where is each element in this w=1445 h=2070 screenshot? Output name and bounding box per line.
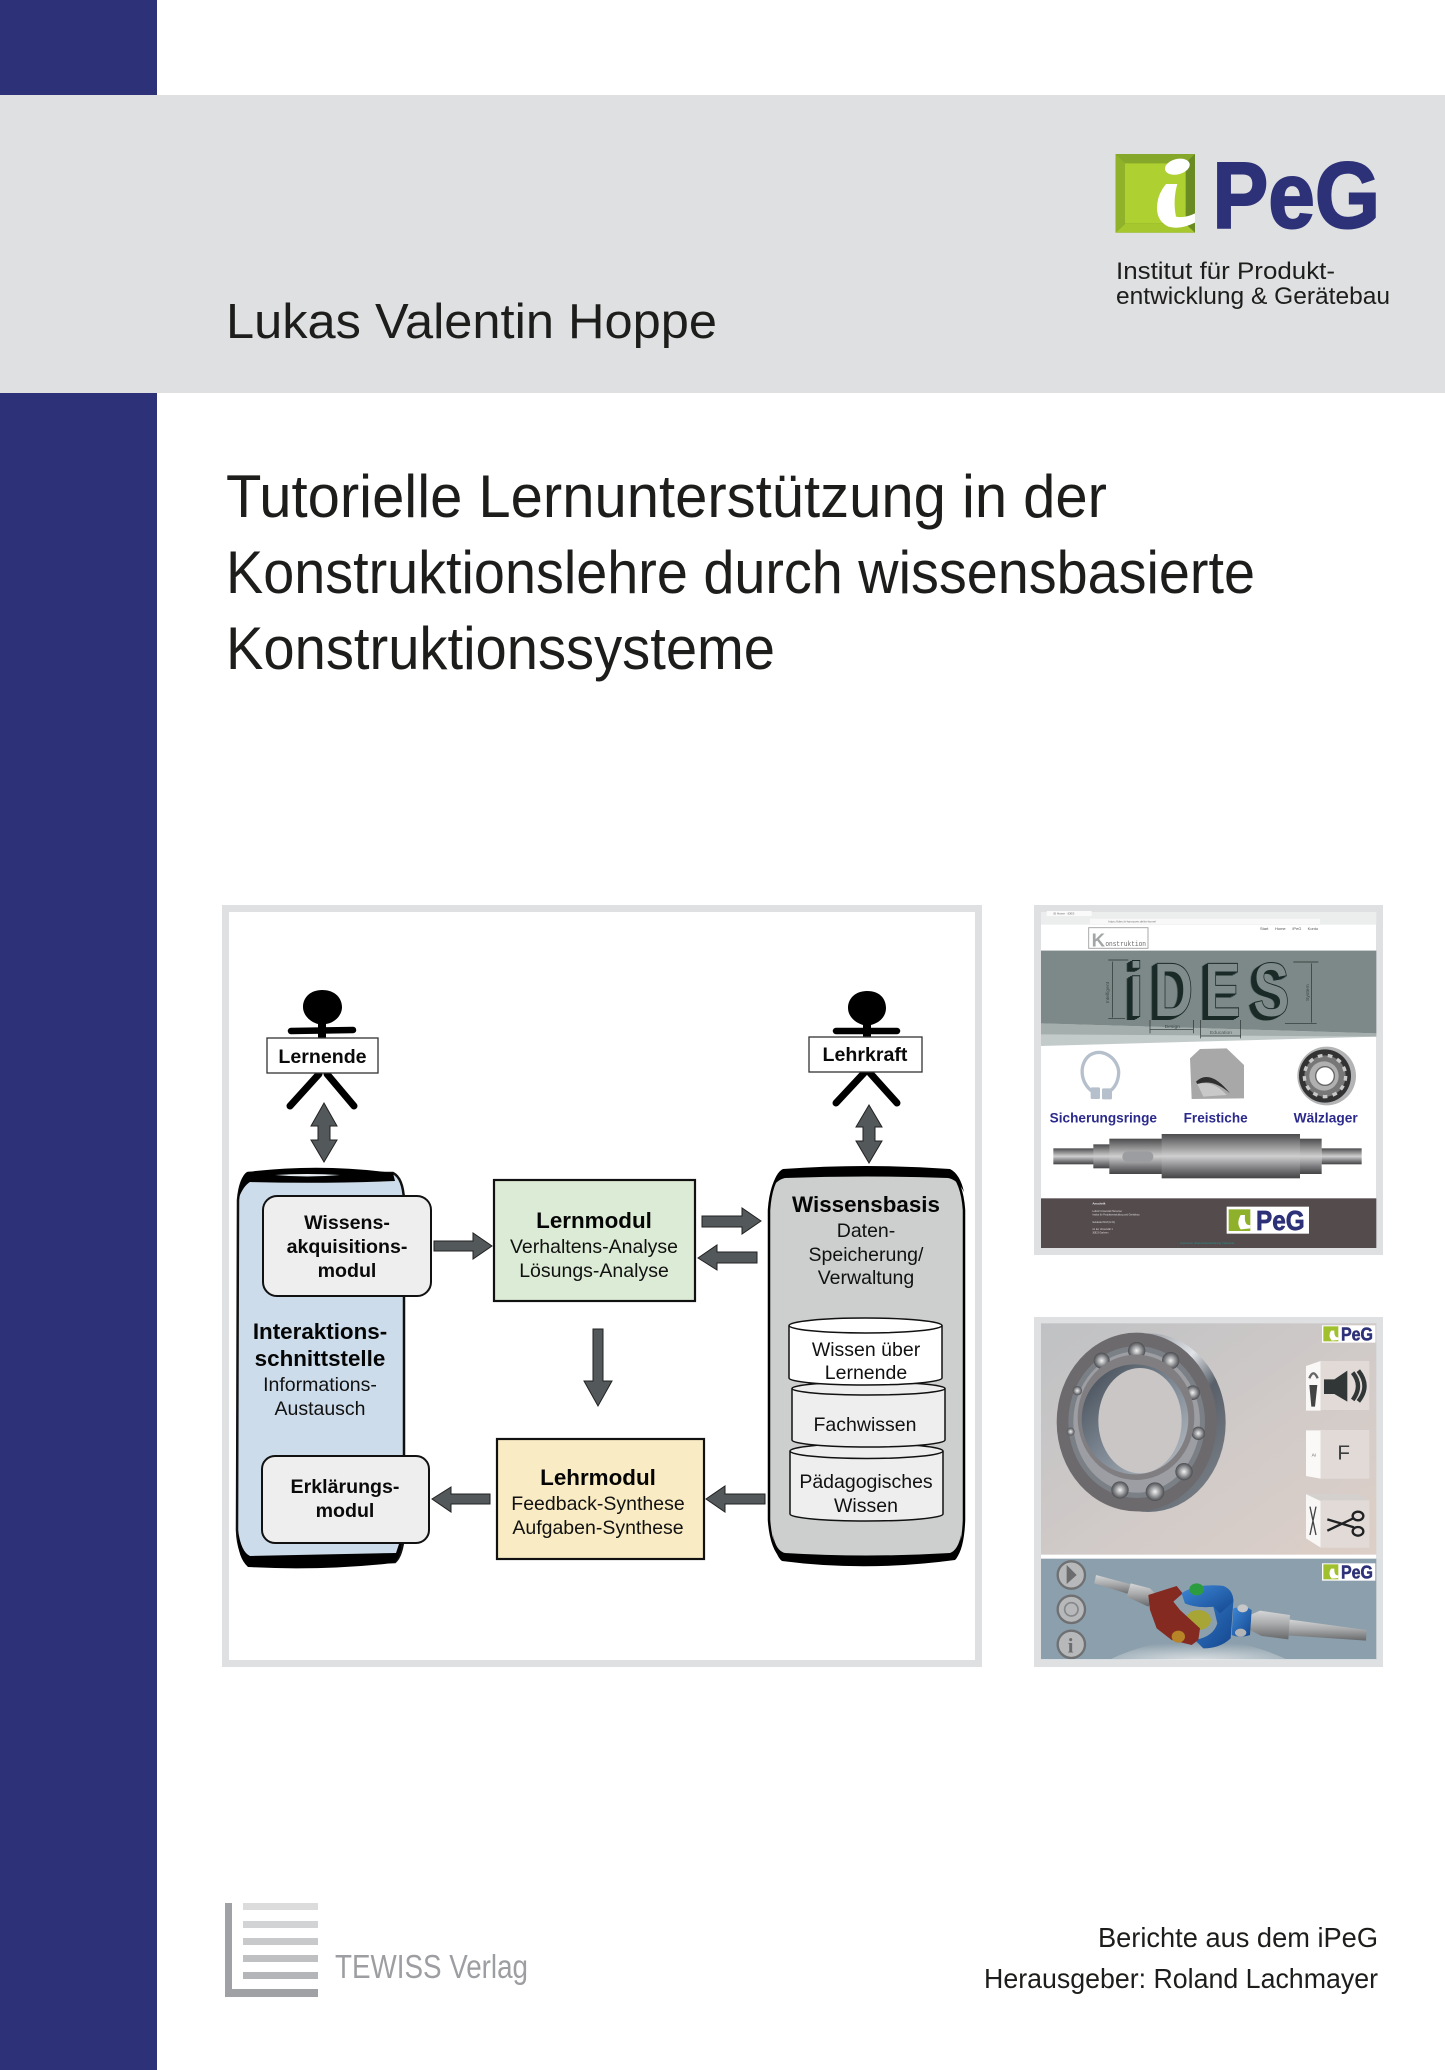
3D bearing scene bbox=[1041, 1323, 1376, 1555]
browser chrome: iD Home · iDES bbox=[1053, 912, 1074, 916]
cylinder: Pädagogisches Wissen bbox=[790, 1444, 943, 1521]
part labels: Wälzlager bbox=[1294, 1110, 1358, 1126]
browser chrome: Start bbox=[1260, 926, 1269, 931]
part labels: Freistiche bbox=[1184, 1110, 1248, 1126]
control buttons: i bbox=[1068, 1636, 1074, 1658]
control buttons bbox=[1058, 1561, 1085, 1658]
iDES banner: System bbox=[1305, 984, 1311, 1001]
cylinder: Wissen über Lernende bbox=[789, 1318, 942, 1385]
cylinder: Pädagogisches Wissen: Wissen bbox=[834, 1495, 898, 1517]
footer logo bbox=[1227, 1205, 1309, 1236]
box: Erklärungsmodul bbox=[262, 1456, 429, 1543]
icon cube: font: Ai bbox=[1312, 1453, 1316, 1458]
website footer: Leibniz Universität Hannover bbox=[1092, 1210, 1122, 1213]
heading: Interaktionsschnittstelle bbox=[253, 1319, 387, 1420]
model: ball bearing bbox=[1057, 1333, 1226, 1512]
box: Lehrmodul: Feedback-Synthese bbox=[511, 1493, 685, 1515]
arrow: Wissensbasis to Lehrmodul bbox=[706, 1486, 765, 1512]
heading: Wissensbasis: Verwaltung bbox=[818, 1267, 914, 1289]
panel: system architecture diagram bbox=[226, 908, 978, 1664]
series and editor: Herausgeber: Roland Lachmayer bbox=[984, 1963, 1378, 1994]
arrow: Wissensbasis to Lernmodul bbox=[698, 1245, 757, 1270]
website footer: Anschrift bbox=[1092, 1202, 1105, 1206]
icon cube: font bbox=[1306, 1430, 1369, 1479]
box: Lernmodul: Lösungs-Analyse bbox=[519, 1260, 669, 1282]
arrow: Lernmodul to Wissensbasis bbox=[702, 1208, 761, 1234]
panel: 3D bearing and joint screenshots bbox=[1038, 1320, 1380, 1664]
institute name: entwicklung & Gerätebau bbox=[1116, 283, 1390, 310]
arrow: Lernmodul to Lehrmodul bbox=[584, 1329, 612, 1406]
publisher name: TEWISS Verlag bbox=[335, 1948, 528, 1985]
browser chrome: Home bbox=[1275, 926, 1286, 931]
double arrow: Lehrkraft to Wissensbasis bbox=[856, 1105, 882, 1163]
iDES lettering: iDES bbox=[1128, 949, 1290, 1034]
heading: Interaktionsschnittstelle: schnittstelle bbox=[255, 1346, 385, 1371]
author name: Lukas Valentin Hoppe bbox=[226, 295, 717, 349]
heading: Interaktionsschnittstelle: Interaktions- bbox=[253, 1319, 387, 1344]
title bbox=[226, 463, 1255, 682]
panel: iDES website screenshot bbox=[1038, 908, 1380, 1252]
heading: Wissensbasis: Speicherung/ bbox=[809, 1244, 924, 1266]
heading: Interaktionsschnittstelle: Austausch bbox=[274, 1398, 366, 1420]
box: Wissensakquisitionsmodul: Wissens- bbox=[304, 1212, 390, 1234]
box: Wissensakquisitionsmodul bbox=[263, 1196, 431, 1296]
icon: ball bearing bbox=[1297, 1047, 1356, 1105]
cylinder: Wissen über Lernende: Wissen über bbox=[812, 1339, 921, 1361]
blue spine bbox=[0, 0, 157, 2070]
cylinder: Pädagogisches Wissen: Pädagogisches bbox=[799, 1471, 933, 1493]
model: universal joint bbox=[1094, 1575, 1367, 1648]
figure: Lehrkraft: Lehrkraft bbox=[823, 1044, 908, 1066]
website footer: Impressum | Datenschutzerklärung | Startseite bbox=[1180, 1241, 1235, 1245]
icon: undercut bbox=[1190, 1048, 1244, 1099]
logo wordmark: PeG bbox=[1212, 142, 1380, 247]
cylinder: Wissen über Lernende: Lernende bbox=[825, 1362, 907, 1384]
iPeG logo bbox=[1116, 142, 1380, 247]
mini iPeG logo bbox=[1322, 1561, 1375, 1582]
iDES banner bbox=[1041, 949, 1376, 1046]
logo mark bbox=[1116, 154, 1195, 233]
dimension lines bbox=[1108, 960, 1318, 1038]
box: Lernmodul: Verhaltens-Analyse bbox=[510, 1236, 678, 1258]
TEWISS Verlag logo bbox=[225, 1903, 528, 1997]
website footer: Gebäude 8143 (G 01) bbox=[1092, 1222, 1115, 1224]
logo bars bbox=[225, 1903, 318, 1997]
panel: Wissensbasis bbox=[769, 1166, 964, 1566]
box: Lernmodul bbox=[494, 1180, 695, 1301]
iDES banner: Design bbox=[1165, 1024, 1180, 1030]
box: Lernmodul: Lernmodul bbox=[536, 1208, 652, 1233]
institute name: Institut für Produkt- bbox=[1116, 258, 1335, 285]
website footer: 30823 Garbsen bbox=[1092, 1231, 1109, 1234]
icon cube: sound bbox=[1306, 1361, 1369, 1411]
heading: Wissensbasis: Daten- bbox=[837, 1220, 895, 1242]
website footer bbox=[1041, 1198, 1376, 1248]
mini iPeG logo bbox=[1322, 1323, 1375, 1344]
heading: Interaktionsschnittstelle: Informations- bbox=[263, 1374, 377, 1396]
figure: Lehrkraft bbox=[809, 991, 922, 1103]
box: Erklärungsmodul: modul bbox=[316, 1500, 374, 1522]
mini iPeG logo: PeG bbox=[1341, 1561, 1373, 1582]
box: Wissensakquisitionsmodul: modul bbox=[318, 1260, 376, 1282]
arrow: Lehrmodul to Erklärungsmodul bbox=[432, 1487, 490, 1512]
part labels bbox=[1050, 1110, 1358, 1126]
browser chrome: https://ides.iit-hannover.de/iis-home/ bbox=[1108, 920, 1156, 924]
Konstruktion logo: onstruktion bbox=[1105, 941, 1146, 949]
box: Erklärungsmodul: Erklärungs- bbox=[291, 1476, 399, 1498]
double arrow: Lernende to interface bbox=[311, 1103, 337, 1162]
heading: Wissensbasis bbox=[792, 1192, 940, 1289]
browser chrome: Konto bbox=[1308, 926, 1319, 931]
figure: Lernende: Lernende bbox=[278, 1046, 367, 1068]
Konstruktion logo: K bbox=[1092, 930, 1106, 951]
box: Wissensakquisitionsmodul: akquisitions- bbox=[287, 1236, 407, 1258]
part labels: Sicherungsringe bbox=[1050, 1110, 1157, 1126]
browser chrome bbox=[1041, 911, 1376, 931]
heading: Wissensbasis: Wissensbasis bbox=[792, 1192, 940, 1217]
icon: retaining ring bbox=[1082, 1052, 1119, 1099]
grey header band bbox=[0, 95, 1445, 393]
website footer: An der Universität 1 bbox=[1092, 1228, 1113, 1231]
title: Tutorielle Lernunterstützung in der bbox=[226, 463, 1107, 530]
figure: Lernende bbox=[267, 990, 378, 1106]
footer logo: PeG bbox=[1256, 1205, 1305, 1236]
panel: Interaktionsschnittstelle bbox=[237, 1168, 404, 1568]
iDES banner: Intelligent bbox=[1105, 981, 1111, 1003]
browser chrome: IPeG bbox=[1292, 926, 1301, 931]
icon cube: scissors bbox=[1306, 1494, 1369, 1548]
icon cube: font: F bbox=[1337, 1441, 1350, 1464]
box: Lehrmodul: Aufgaben-Synthese bbox=[512, 1517, 684, 1539]
box: Lehrmodul bbox=[497, 1439, 704, 1559]
mini iPeG logo: PeG bbox=[1341, 1323, 1373, 1344]
Konstruktion logo bbox=[1089, 928, 1148, 951]
title: Konstruktionslehre durch wissensbasierte bbox=[226, 539, 1255, 606]
title: Konstruktionssysteme bbox=[226, 615, 775, 682]
series and editor bbox=[984, 1922, 1378, 1994]
box: Lehrmodul: Lehrmodul bbox=[540, 1465, 656, 1490]
website footer: Institut für Produktentwicklung und Gerätebau bbox=[1092, 1213, 1140, 1216]
cylinder: Fachwissen: Fachwissen bbox=[814, 1414, 916, 1436]
iDES banner: Education bbox=[1210, 1030, 1232, 1036]
3D universal joint scene bbox=[1041, 1559, 1376, 1659]
shaft illustration bbox=[1053, 1134, 1362, 1178]
cylinder: Fachwissen bbox=[792, 1382, 945, 1447]
series and editor: Berichte aus dem iPeG bbox=[1098, 1922, 1378, 1953]
arrow: to Lernmodul bbox=[434, 1233, 492, 1259]
institute name bbox=[1116, 258, 1390, 310]
